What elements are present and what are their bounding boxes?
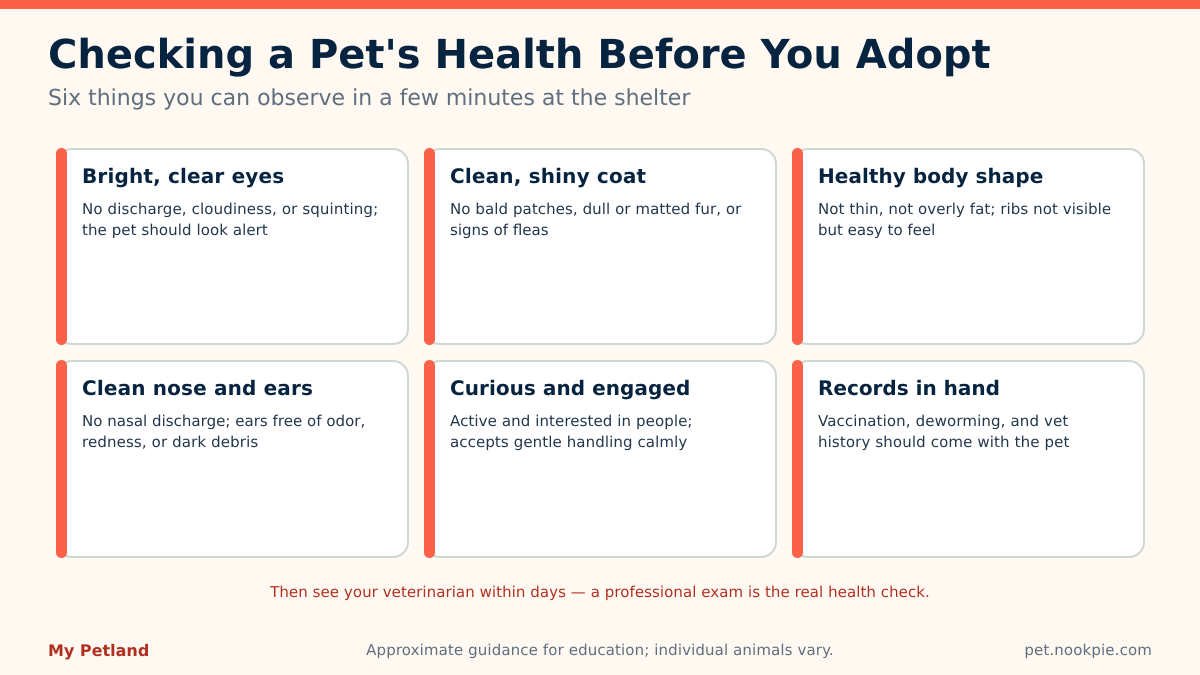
- footer url: pet.nookpie.com: [1024, 641, 1152, 659]
- title: Checking a Pet's Health Before You Adopt: [48, 32, 991, 78]
- subtitle: Six things you can observe in a few minutes at the shelter: [48, 86, 690, 111]
- panel: clean nose and ears: Clean nose and ears: [82, 376, 313, 400]
- footer brand: My Petland: [48, 641, 149, 660]
- panel: curious and engaged: Active and interested in people;: [450, 412, 693, 430]
- panel: clean nose and ears: No nasal discharge; ears free of odor,: [82, 412, 365, 430]
- panel: clean, shiny coat: signs of fleas: [450, 221, 549, 239]
- panel: records in hand: Vaccination, deworming, and vet: [818, 412, 1068, 430]
- panel: clean nose and ears: redness, or dark debris: [82, 433, 258, 451]
- panel: curious and engaged: accepts gentle handling calmly: [450, 433, 687, 451]
- panel: bright, clear eyes: [56, 148, 409, 345]
- panel: healthy body shape: Not thin, not overly fat; ribs not visible: [818, 200, 1111, 218]
- panel: bright, clear eyes: the pet should look alert: [82, 221, 268, 239]
- panel: bright, clear eyes: Bright, clear eyes: [82, 164, 284, 188]
- panel: clean, shiny coat: [424, 148, 777, 345]
- panel: records in hand: [792, 360, 1145, 558]
- panel: records in hand: Records in hand: [818, 376, 1000, 400]
- footer note: Approximate guidance for education; individual animals vary.: [366, 641, 834, 659]
- panel: records in hand: history should come with the pet: [818, 433, 1069, 451]
- panel: curious and engaged: Curious and engaged: [450, 376, 690, 400]
- panel: healthy body shape: but easy to feel: [818, 221, 935, 239]
- panel: curious and engaged: [424, 360, 777, 558]
- callout: Then see your veterinarian within days — a professional exam is the real health check.: [270, 583, 930, 601]
- top accent band: [0, 0, 1200, 9]
- panel: clean nose and ears: [56, 360, 409, 558]
- panel: healthy body shape: [792, 148, 1145, 345]
- panel: healthy body shape: Healthy body shape: [818, 164, 1043, 188]
- panel: bright, clear eyes: No discharge, cloudiness, or squinting;: [82, 200, 378, 218]
- panel: clean, shiny coat: Clean, shiny coat: [450, 164, 646, 188]
- panel: clean, shiny coat: No bald patches, dull or matted fur, or: [450, 200, 741, 218]
